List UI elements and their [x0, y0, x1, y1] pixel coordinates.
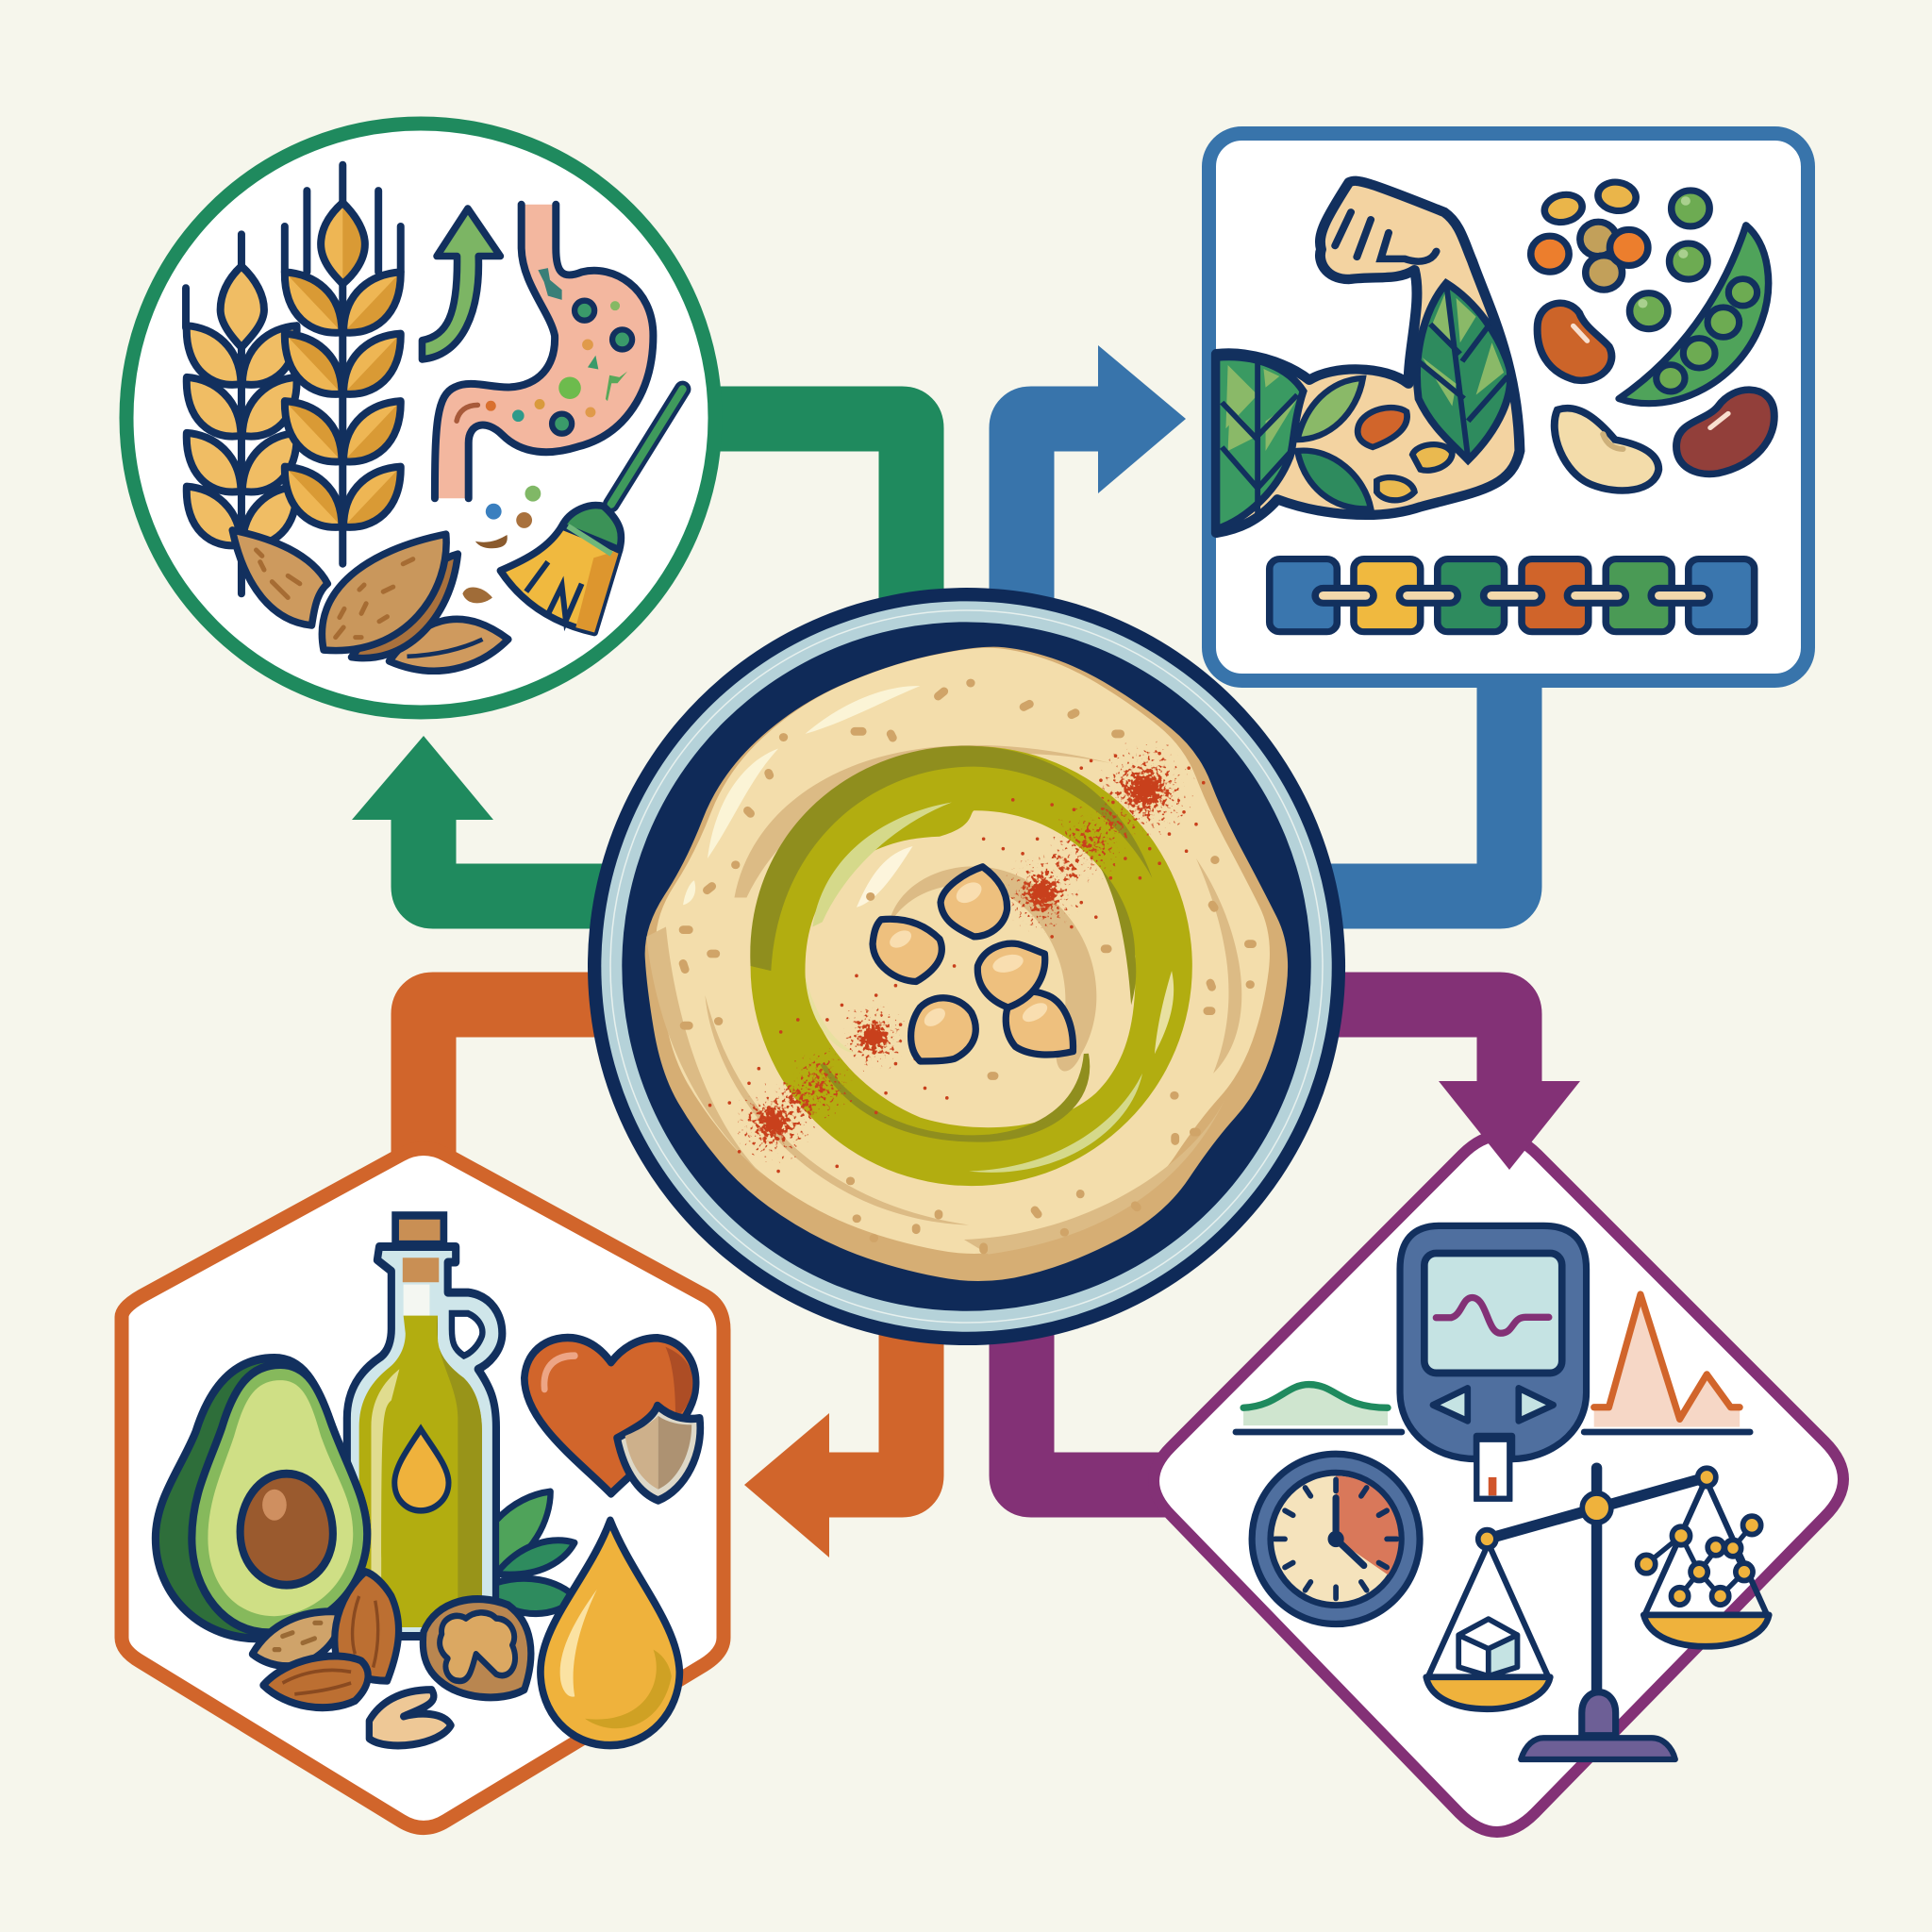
panel 1 artwork: [186, 165, 683, 671]
connector: orange left: [424, 1005, 604, 1170]
icon: nuts: [252, 1572, 531, 1745]
panel: blood sugar diamond: [1154, 1136, 1843, 1832]
connector: purple bottom: [1022, 1321, 1179, 1485]
icon: heart with shield: [525, 1338, 700, 1501]
icon: lentils and peas: [1531, 179, 1709, 329]
icon: amino acid chain: [1270, 559, 1755, 632]
central hummus bowl: [588, 588, 1345, 1345]
arrowhead: green: [352, 736, 493, 820]
panel 3 artwork: [156, 1215, 700, 1745]
icon: broom and swept particles: [462, 390, 683, 633]
icon: left wheat stalk: [186, 234, 297, 593]
hummus contents: [645, 647, 1288, 1281]
connector: green top: [717, 419, 911, 604]
bowl rim: [588, 588, 1345, 1345]
icon: low glucose curve: [1236, 1385, 1402, 1432]
arrowhead: blue: [1098, 345, 1186, 493]
icon: glucose meter: [1400, 1225, 1587, 1499]
icon: olive oil bottle: [347, 1215, 502, 1636]
paprika dusting: [710, 739, 1204, 1172]
connector: green left to arrow: [424, 811, 604, 896]
icon: leaves: [496, 1491, 576, 1614]
icon: whole grain seeds: [232, 530, 508, 671]
panel 2 artwork: [1216, 179, 1774, 632]
arrowhead: orange: [744, 1413, 829, 1557]
icon: right wheat stalk: [285, 165, 401, 564]
icon: golden oil drop: [541, 1521, 679, 1745]
connector: blue top to arrow: [1022, 419, 1104, 604]
panel 4 artwork: [1236, 1225, 1769, 1759]
arrowhead: purple over diamond: [1439, 1081, 1580, 1170]
olive oil pool: [750, 746, 1192, 1186]
icon: kidney beans: [1538, 303, 1774, 491]
panel: fibre and gut health circle: [126, 124, 715, 712]
icon: clock: [1252, 1454, 1420, 1624]
icon: stomach and gut: [435, 205, 653, 498]
panel: plant protein rounded square: [1209, 134, 1807, 681]
icon: flexed arm of leaves and beans: [1216, 181, 1520, 533]
icon: green up arrow: [422, 208, 500, 359]
icon: glucose spike chart: [1584, 1294, 1750, 1432]
icon: pea pod: [1619, 225, 1769, 404]
connector: purple right: [1321, 1005, 1509, 1094]
panel: healthy fats hexagon: [122, 1149, 724, 1828]
connectors and arrows: [352, 345, 1509, 1557]
connector: blue right: [1321, 679, 1509, 896]
sesame flecks: [683, 683, 1253, 1250]
connector: orange bottom to arrow: [821, 1321, 911, 1485]
icon: avocado: [156, 1357, 367, 1639]
icon: balance scale with sugar cube and molecule: [1426, 1468, 1769, 1759]
chickpeas: [873, 867, 1074, 1061]
hummus swirl: [645, 647, 1288, 1281]
